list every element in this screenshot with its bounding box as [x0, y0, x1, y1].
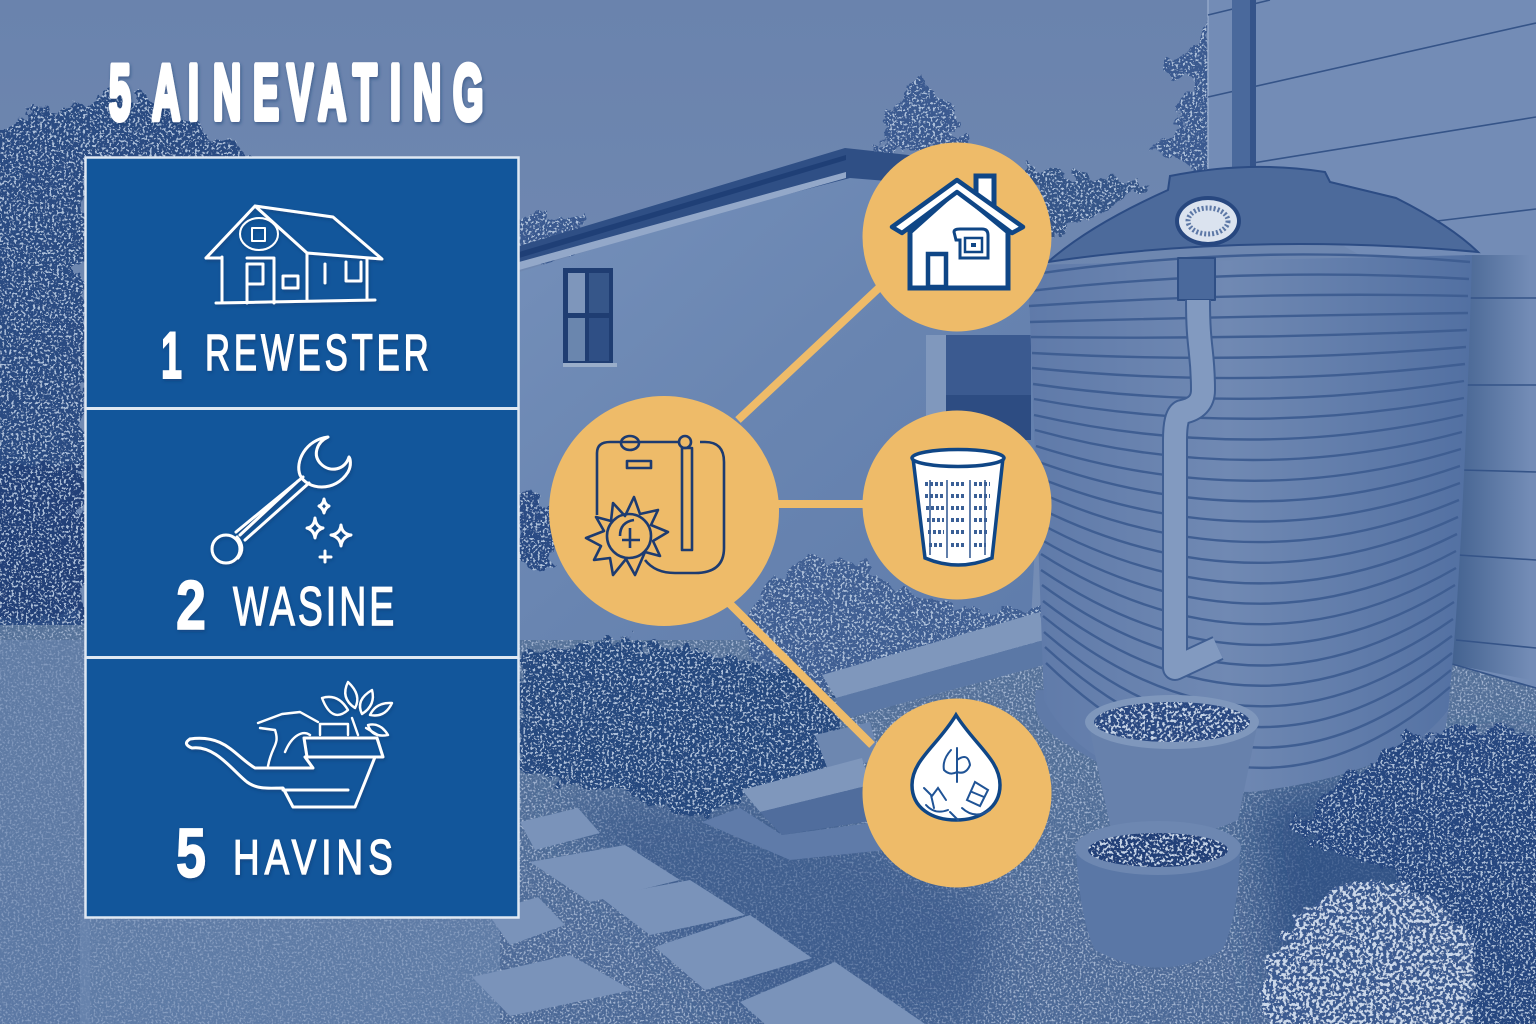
house window: [563, 268, 617, 367]
step 2 label: [176, 566, 394, 644]
step 2 icon: wrench with sparkles: [212, 437, 351, 563]
step 3 label: 5: [176, 814, 206, 892]
drop leaves: [924, 748, 990, 820]
doorway recess: [926, 335, 1031, 450]
tank lid: [1048, 167, 1478, 262]
house eaves and gutter: [519, 148, 1000, 270]
step 3 label: [176, 814, 393, 892]
downpipe from roof: [1232, 0, 1256, 170]
hedge and shrubs: [0, 465, 1040, 815]
step 2 label: 2: [176, 566, 206, 644]
house wall: [519, 172, 1040, 640]
circle: cup icon: [862, 410, 1052, 600]
step 1 label: [161, 318, 429, 392]
step 3 label: HAVINS: [233, 831, 393, 885]
circle: home icon: [862, 142, 1052, 332]
siding wall: [1208, 0, 1536, 688]
hub circle: tank system icon: [549, 396, 779, 626]
stepping stones: [472, 808, 925, 1024]
tank corrugation: [1028, 254, 1470, 768]
concrete steps: [702, 612, 1044, 860]
trees on the left: [0, 22, 1215, 650]
left panel: steps list: [85, 158, 519, 918]
step 1 label: 1: [161, 318, 182, 392]
connector lines: [728, 285, 882, 745]
cup markings: [925, 480, 990, 558]
flower pots: [1075, 695, 1259, 968]
step 1 icon: house outline: [206, 206, 382, 303]
roof behind house: [980, 168, 1150, 240]
rain tank: [1028, 167, 1478, 792]
step 1 label: REWESTER: [205, 326, 429, 382]
step 2 label: WASINE: [233, 575, 394, 637]
right bushes: [1262, 727, 1536, 1024]
circle: water drop icon: [862, 698, 1052, 888]
tank badge: [1175, 196, 1241, 246]
step 3 icon: planter trough: [186, 682, 392, 807]
tank downspout: [1175, 258, 1218, 668]
lawn: [0, 625, 1536, 1024]
title: 5 AINEVATING: [109, 49, 483, 137]
